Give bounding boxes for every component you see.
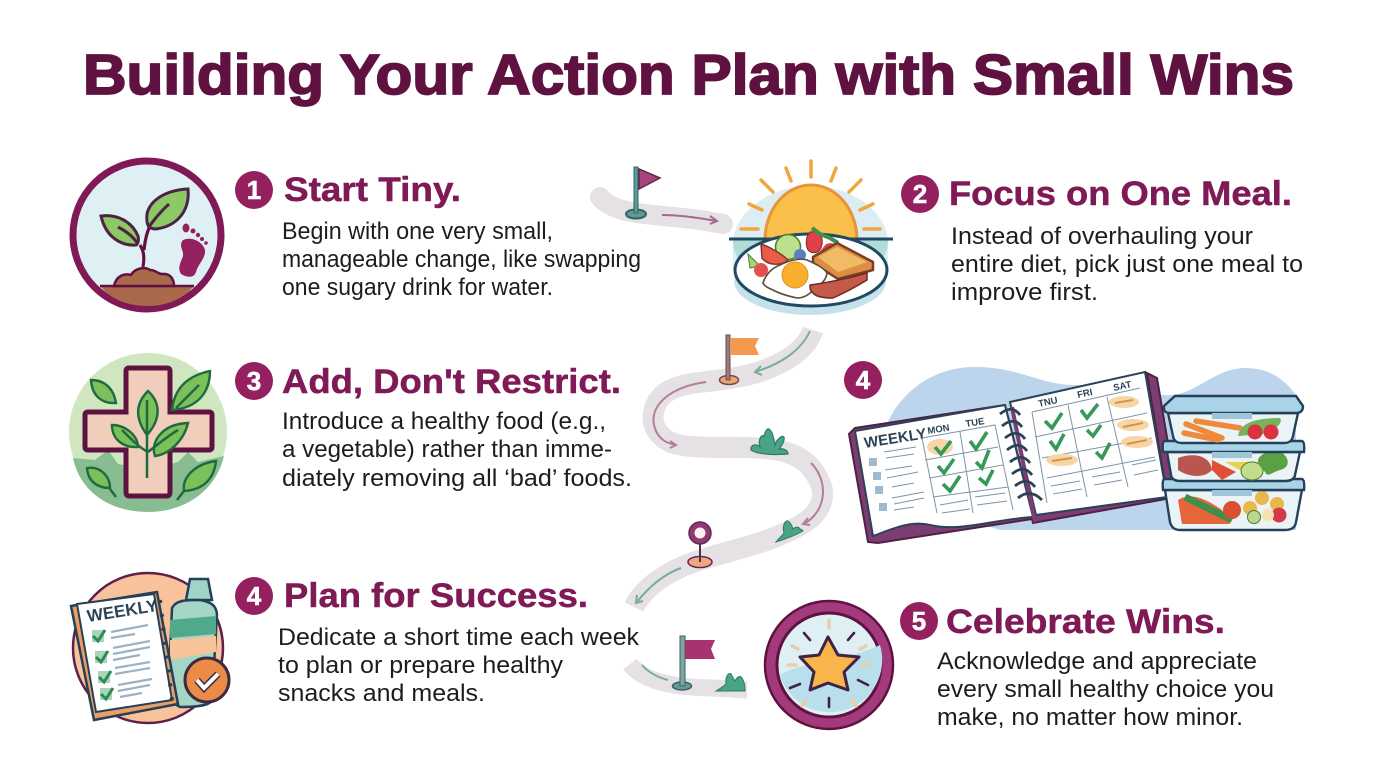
icon: footprint xyxy=(179,224,208,277)
panel: step 1 start tiny xyxy=(73,161,641,309)
number badge 2 xyxy=(901,175,939,213)
panel: step 4 plan for success xyxy=(71,573,640,723)
checklist squares xyxy=(869,458,887,511)
path segment: top road with flag xyxy=(600,167,723,224)
container middle xyxy=(1163,441,1304,481)
meal prep containers xyxy=(1163,396,1304,530)
icon: weekly checklist and bottle: WEEKLY xyxy=(86,596,160,626)
panel: weekly planner illustration xyxy=(844,361,1304,543)
weekly heading: WEEKLY xyxy=(863,425,928,452)
body text: Acknowledge and appreciate xyxy=(937,648,1257,675)
body text: snacks and meals. xyxy=(278,680,485,707)
container bottom xyxy=(1163,479,1304,530)
body text: make, no matter how minor. xyxy=(937,704,1243,731)
body text xyxy=(278,624,640,707)
body text xyxy=(937,648,1274,731)
left page grid xyxy=(884,388,1158,513)
planner notebook: TNU xyxy=(1037,395,1059,410)
icon: map pin xyxy=(688,522,712,568)
icon: plus sign with leaves xyxy=(69,353,227,512)
number badge 5: 5 xyxy=(912,606,926,636)
number badge 1 xyxy=(235,171,273,209)
body text: Introduce a healthy food (e.g., xyxy=(282,408,606,435)
body text: entire diet, pick just one meal to xyxy=(951,251,1303,278)
body text: a vegetable) rather than imme- xyxy=(282,436,612,463)
path segment: lower road with flag xyxy=(630,636,747,691)
body text xyxy=(282,218,641,301)
panel: step 2 focus on one meal xyxy=(729,161,1303,315)
number badge 2: 2 xyxy=(913,179,927,209)
heading: Plan for Success. xyxy=(284,577,588,615)
heading: Add, Don't Restrict. xyxy=(282,363,621,401)
title: Building Your Action Plan with Small Wins xyxy=(83,43,1294,107)
blue background blob xyxy=(888,367,1296,530)
body text: Instead of overhauling your xyxy=(951,223,1253,250)
heading: Focus on One Meal. xyxy=(949,175,1292,213)
number badge 5 xyxy=(900,602,938,640)
icon: small bush xyxy=(776,521,803,542)
body text: to plan or prepare healthy xyxy=(278,652,564,679)
planner notebook xyxy=(849,372,1177,543)
highlights xyxy=(927,396,1153,466)
number badge 3 xyxy=(235,362,273,400)
number badge 4 xyxy=(235,577,273,615)
path segment: winding road xyxy=(634,330,823,607)
spiral binding xyxy=(1000,409,1042,500)
number badge 1: 1 xyxy=(247,175,261,205)
body text: diately removing all ‘bad’ foods. xyxy=(282,465,632,492)
heading: Start Tiny. xyxy=(284,171,461,209)
number badge 4 xyxy=(844,361,882,399)
icon: sunrise breakfast plate xyxy=(729,161,893,315)
planner notebook: MON xyxy=(927,423,950,437)
planner notebook: FRI xyxy=(1076,387,1094,401)
body text xyxy=(951,223,1303,306)
icon: weekly checklist and bottle xyxy=(71,573,229,723)
panel: step 3 add, don't restrict xyxy=(69,353,632,512)
planner notebook: TUE xyxy=(965,416,985,430)
body text: Begin with one very small, xyxy=(282,218,553,245)
panel: step 5 celebrate wins xyxy=(765,601,1274,731)
body text xyxy=(282,408,632,492)
planner notebook: SAT xyxy=(1112,379,1133,394)
container top xyxy=(1164,396,1303,443)
number badge 4: 4 xyxy=(856,365,871,395)
heading: Celebrate Wins. xyxy=(946,603,1225,641)
icon: orange flag xyxy=(720,335,759,384)
body text: every small healthy choice you xyxy=(937,676,1274,703)
icon: bush xyxy=(751,429,788,455)
body text: Dedicate a short time each week xyxy=(278,624,640,651)
body text: one sugary drink for water. xyxy=(282,274,553,301)
body text: manageable change, like swapping xyxy=(282,246,641,273)
number badge 4: 4 xyxy=(247,581,262,611)
number badge 3: 3 xyxy=(247,366,261,396)
body text: improve first. xyxy=(951,279,1098,306)
icon: sprout and footprint xyxy=(73,161,221,309)
icon: star badge xyxy=(765,601,893,729)
green checks xyxy=(935,404,1110,491)
